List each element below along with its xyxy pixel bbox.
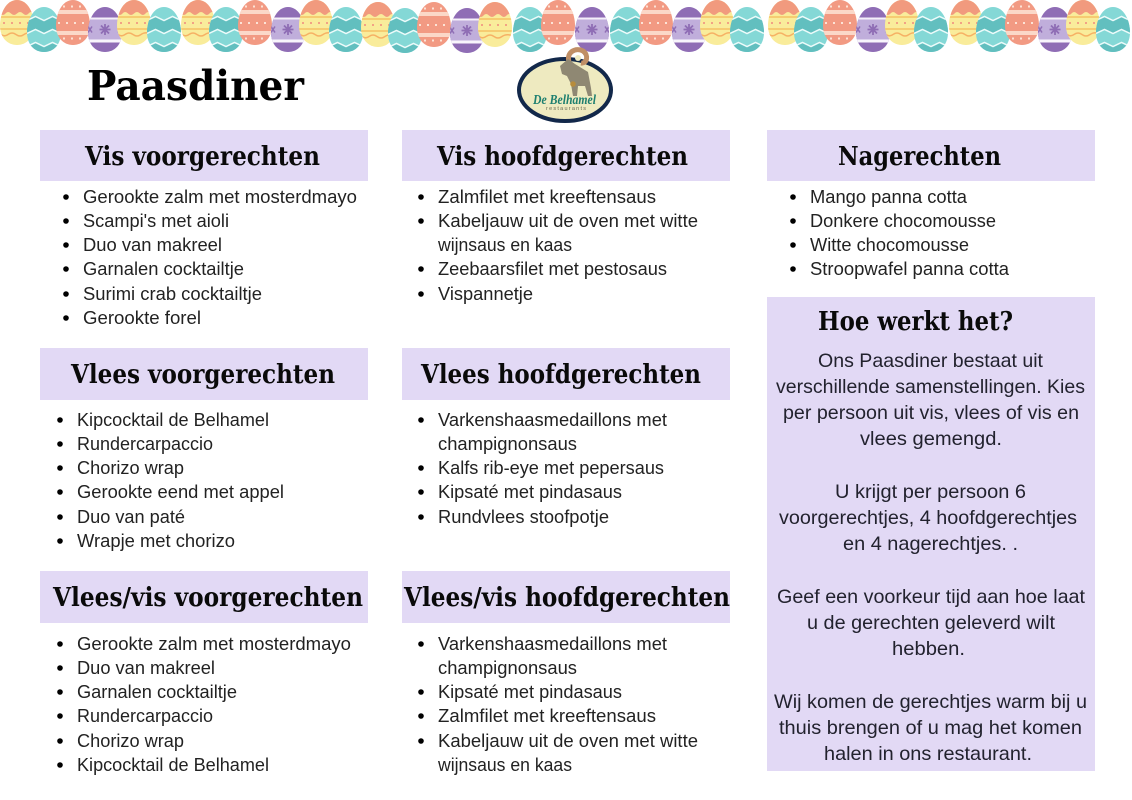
list: Vis hoofdgerechten [418, 187, 698, 304]
list: Vlees voorgerechten [57, 410, 284, 551]
list: Vis hoofdgerechten: Zalmfilet met kreeftensaus [438, 187, 656, 207]
panel: Hoe werkt het? [767, 297, 1095, 771]
panel: Vlees/vis hoofdgerechten heading [402, 571, 730, 623]
heading: Hoe werkt het?: Hoe werkt het? [818, 307, 1013, 337]
panel: Nagerechten heading: Nagerechten [838, 142, 1001, 172]
list: Vlees hoofdgerechten: champignonsaus [438, 434, 577, 454]
text block: explanation: vlees gemengd. [860, 428, 1002, 450]
list: Nagerechten [790, 187, 1010, 279]
list: Nagerechten: Donkere chocomousse [810, 211, 996, 231]
text block: explanation: U krijgt per persoon 6 [835, 481, 1026, 503]
text block: explanation [774, 350, 1087, 765]
text block: explanation: Ons Paasdiner bestaat uit [818, 350, 1044, 372]
list: Vlees/vis hoofdgerechten: champignonsaus [438, 658, 577, 678]
text block: explanation: u de gerechten geleverd wilt [807, 612, 1056, 634]
list: Vlees/vis voorgerechten: Duo van makreel [77, 658, 215, 678]
list: Vlees hoofdgerechten: Varkenshaasmedaillons met [438, 410, 667, 430]
logo: De Belhamel restaurants [519, 50, 611, 121]
list: Vis voorgerechten: Surimi crab cocktailtje [83, 284, 262, 304]
text block: explanation: voorgerechtjes, 4 hoofdgerechtjes [779, 507, 1077, 529]
panel: Vis hoofdgerechten heading [402, 130, 730, 181]
text block: explanation: halen in ons restaurant. [824, 743, 1032, 765]
list: Vlees voorgerechten: Duo van paté [77, 507, 185, 527]
title: Paasdiner [87, 62, 305, 110]
list: Vlees hoofdgerechten: Rundvlees stoofpotje [438, 507, 609, 527]
list: Vlees/vis hoofdgerechten [418, 634, 698, 775]
panel: Vis hoofdgerechten heading: Vis hoofdgerechten [436, 142, 688, 172]
panel: Nagerechten heading [767, 130, 1095, 181]
list: Vlees voorgerechten: Rundercarpaccio [77, 434, 213, 454]
list: Nagerechten: Mango panna cotta [810, 187, 968, 207]
list: Vlees/vis hoofdgerechten: Kabeljauw uit de oven met witte [438, 731, 698, 751]
list: Vis voorgerechten: Gerookte forel [83, 308, 201, 328]
panel: Vlees/vis hoofdgerechten heading: Vlees/vis hoofdgerechten [403, 583, 730, 613]
list: Vlees/vis voorgerechten: Chorizo wrap [77, 731, 184, 751]
panel: Vlees hoofdgerechten heading [402, 348, 730, 400]
list: Nagerechten: Stroopwafel panna cotta [810, 259, 1010, 279]
text block: explanation: Wij komen de gerechtjes warm bij u [774, 691, 1087, 713]
text block: explanation: per persoon uit vis, vlees of vis en [783, 402, 1079, 424]
list: Nagerechten: Witte chocomousse [810, 235, 969, 255]
list: Vis hoofdgerechten: Vispannetje [438, 284, 533, 304]
list: Vis voorgerechten: Garnalen cocktailtje [83, 259, 244, 279]
list: Vlees/vis voorgerechten: Rundercarpaccio [77, 706, 213, 726]
list: Vlees/vis hoofdgerechten: Kipsaté met pindasaus [438, 682, 622, 702]
panel: Vlees/vis voorgerechten heading [40, 571, 368, 623]
list: Vlees voorgerechten: Gerookte eend met appel [77, 482, 284, 502]
list: Vlees voorgerechten: Wrapje met chorizo [77, 531, 235, 551]
list: Vis hoofdgerechten: Kabeljauw uit de oven met witte [438, 211, 698, 231]
list: Vlees hoofdgerechten: Kalfs rib-eye met pepersaus [438, 458, 664, 478]
list: Vlees hoofdgerechten [418, 410, 667, 527]
list: Vis voorgerechten [63, 187, 357, 328]
panel: Vlees voorgerechten heading [40, 348, 368, 400]
list: Vis voorgerechten: Scampi's met aioli [83, 211, 229, 231]
list: Vlees/vis voorgerechten: Kipcocktail de Belhamel [77, 755, 269, 775]
list: Vlees hoofdgerechten: Kipsaté met pindasaus [438, 482, 622, 502]
list: Vlees/vis hoofdgerechten: Zalmfilet met kreeftensaus [438, 706, 656, 726]
list: Vlees voorgerechten: Kipcocktail de Belhamel [77, 410, 269, 430]
panel: Vlees hoofdgerechten heading: Vlees hoofdgerechten [420, 360, 701, 390]
list: Vis voorgerechten: Duo van makreel [83, 235, 222, 255]
egg garland border [0, 0, 1130, 54]
list: Vlees/vis hoofdgerechten: wijnsaus en kaas [437, 755, 572, 775]
text block: explanation: thuis brengen of u mag het komen [779, 717, 1082, 739]
list: Vis hoofdgerechten: wijnsaus en kaas [437, 235, 572, 255]
icon: ram [560, 50, 592, 96]
text block: explanation: verschillende samenstellingen. Kies [776, 376, 1085, 398]
text block: explanation: hebben. [892, 638, 965, 660]
text block: explanation: Geef een voorkeur tijd aan hoe laat [777, 586, 1086, 608]
list: Vlees/vis voorgerechten: Gerookte zalm met mosterdmayo [77, 634, 351, 654]
list: Vlees voorgerechten: Chorizo wrap [77, 458, 184, 478]
panel: Vis voorgerechten heading [40, 130, 368, 181]
panel: Vlees voorgerechten heading: Vlees voorgerechten [70, 360, 335, 390]
list: Vlees/vis voorgerechten: Garnalen cocktailtje [77, 682, 237, 702]
panel: Vis voorgerechten heading: Vis voorgerechten [84, 142, 320, 172]
list: Vlees/vis voorgerechten [57, 634, 351, 775]
logo: De Belhamel restaurants: restaurants [546, 106, 586, 112]
logo: De Belhamel restaurants: De Belhamel [532, 93, 596, 108]
list: Vlees/vis hoofdgerechten: Varkenshaasmedaillons met [438, 634, 667, 654]
panel: Vlees/vis voorgerechten heading: Vlees/vis voorgerechten [52, 583, 363, 613]
text block: explanation: en 4 nagerechtjes. . [843, 533, 1018, 555]
list: Vis voorgerechten: Gerookte zalm met mosterdmayo [83, 187, 357, 207]
list: Vis hoofdgerechten: Zeebaarsfilet met pestosaus [438, 259, 667, 279]
